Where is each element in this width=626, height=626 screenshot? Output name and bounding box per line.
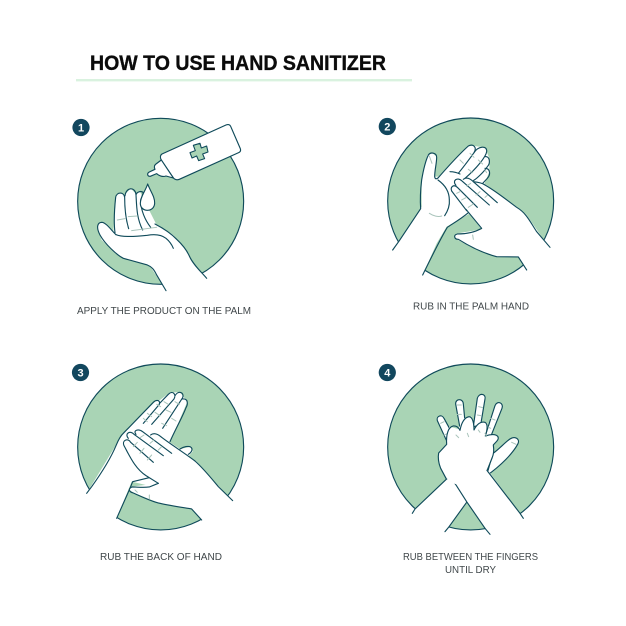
icon: product drop [140, 184, 155, 210]
icon: front hand [438, 417, 498, 488]
caption: step 4: UNTIL DRY [445, 564, 496, 576]
green circle [388, 118, 554, 284]
badge: 1: 1 [78, 122, 84, 134]
green circle [388, 364, 554, 530]
caption: step 2: RUB IN THE PALM HAND [413, 300, 529, 312]
badge: 3 [72, 364, 89, 381]
caption: step 4: RUB BETWEEN THE FINGERS [403, 551, 538, 563]
badge: 2: 2 [384, 122, 390, 134]
panel: step 4 [388, 364, 554, 545]
icon: lower hand [80, 392, 193, 522]
icon: left hand [383, 145, 490, 283]
badge: 1 [72, 119, 90, 136]
badge: 2 [379, 118, 396, 135]
title: HOW TO USE HAND SANITIZER [90, 52, 386, 75]
caption: step 4 [403, 551, 538, 576]
caption: step 1: APPLY THE PRODUCT ON THE PALM [77, 305, 251, 317]
green circle [78, 118, 244, 284]
panel: step 1 [78, 118, 244, 303]
green circle [78, 364, 244, 530]
icon: hand with open palm [97, 188, 207, 303]
badge: 4: 4 [384, 368, 391, 380]
title underline [76, 79, 412, 81]
icon: right arm [446, 465, 527, 537]
badge: 4 [379, 364, 396, 381]
icon: right hand [451, 178, 550, 270]
panel: step 2 [383, 118, 554, 284]
icon: rear fingers and thumb [437, 394, 518, 476]
icon: left arm [407, 478, 467, 545]
icon: upper hand [123, 430, 233, 520]
icon: sanitizer tube [148, 125, 241, 180]
caption: step 3: RUB THE BACK OF HAND [100, 551, 222, 563]
panel: step 3 [78, 364, 244, 530]
badge: 3: 3 [77, 368, 84, 380]
